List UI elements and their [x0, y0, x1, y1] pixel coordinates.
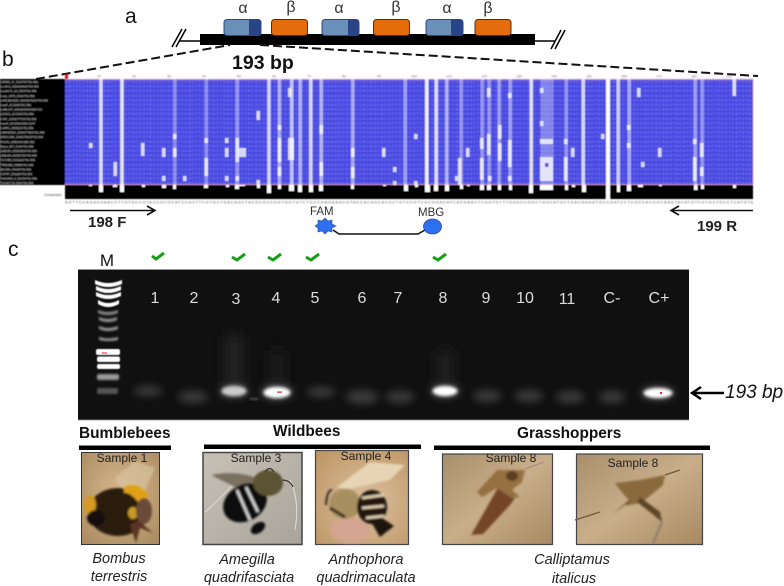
blue conserved residue block: AGTTCCAGACHAACCTTGTGCCGTACCGCGCATCCACTTCGTGCTGACAGCTACGCGCCGGTGGTGTCTGCCGAGAAGCGTACCACAGCACGCTGTCCGTCGCGGACATCACGAACTCGGTGTTTGAGCCGGCTGGCATGCTGACGAAGTGCCGATCCTCGCCACGGCAAGTACATGTCGTGCTGCCTCATGTA [65, 107, 751, 112]
divider Bumblebees [79, 446, 171, 450]
sequence name column: ADEAN_00083700/761-956 [1, 154, 37, 158]
MBG label: MBG [418, 207, 444, 219]
reverse primer arrow [671, 206, 753, 215]
panel a: gene structure diagram [172, 0, 565, 49]
lane numbers: C+ [649, 290, 669, 307]
blue conserved residue block: AGTTCCAGACHAACCTTGTGCCGTACCGCGCATCCACTTCGTGCTGACAGCTACGCGCCGGTGGTGTCTGCCGAGAAGCGTACCACAGCACGCTGTCCGTCGCGGACATCACGAACTCGGTGTTTGAGCCGGCTGGCATGCTGACGAAGTGCCGATCCTCGCCACGGCAAGTACATGTCGTGCTGCCTCATGTA [65, 180, 751, 185]
consensus bar with notches [65, 185, 753, 199]
sequence name column: GFAF1_6*_313/797/761-956 [1, 80, 38, 84]
species label Calliptamus italicus [534, 552, 610, 586]
blue conserved residue block: AGTTCCAGACHAACCTTGTGCCGTACCGCGCATCCACTTCGTGCTGACAGCTACGCGCCGGTGGTGTCTGCCGAGAAGCGTACCACAGCACGCTGTCCGTCGCGGACATCACGAACTCGGTGTTTGAGCCGGCTGGCATGCTGACGAAGTGCCGATCCTCGCCACGGCAAGTACATGTCGTGCTGCCTCATGTA [65, 97, 751, 102]
position ruler: 80 [342, 74, 346, 78]
right break line [535, 30, 565, 49]
position ruler: 10 [97, 74, 101, 78]
sequence name column: LBRM2903_1300077500/761-956 [1, 131, 45, 135]
sequence name column: TcYV88_0101120/761-956 [1, 158, 35, 162]
blue conserved residue block: AGTTCCAGACHAACCTTGTGCCGTACCGCGCATCCACTTCGTGCTGACAGCTACGCGCCGGTGGTGTCTGCCGAGAAGCGTACCACAGCACGCTGTCCGTCGCGGACATCACGAACTCGGTGTTTGAGCCGGCTGGCATGCTGACGAAGTGCCGATCCTCGCCACGGCAAGTACATGTCGTGCTGCCTCATGTA [65, 162, 751, 167]
position ruler: 30 [167, 74, 171, 78]
photo: Calliptamus italicus lateral [575, 454, 702, 544]
blue conserved residue block: AGTTCCAGACHAACCTTGTGCCGTACCGCGCATCCACTTCGTGCTGACAGCTACGCGCCGGTGGTGTCTGCCGAGAAGCGTACCACAGCACGCTGTCCGTCGCGGACATCACGAACTCGGTGTTTGAGCCGGCTGGCATGCTGACGAAGTGCCGATCCTCGCCACGGCAAGTACATGTCGTGCTGCCTCATGTA [65, 88, 751, 93]
species label Bombus terrestris [91, 551, 147, 585]
blue conserved residue block: AGTTCCAGACHAACCTTGTGCCGTACCGCGCATCCACTTCGTGCTGACAGCTACGCGCCGGTGGTGTCTGCCGAGAAGCGTACCACAGCACGCTGTCCGTCGCGGACATCACGAACTCGGTGTTTGAGCCGGCTGGCATGCTGACGAAGTGCCGATCCTCGCCACGGCAAGTACATGTCGTGCTGCCTCATGTA [65, 166, 751, 171]
sequence name column: C3747_236g36/761-956 [1, 172, 33, 176]
panel label b: b [2, 48, 14, 71]
lane numbers: 5 [311, 290, 320, 307]
alpha exon 1 [224, 20, 261, 36]
species label Anthophora quadrimaculata [316, 552, 416, 586]
blue conserved residue block: AGTTCCAGACHAACCTTGTGCCGTACCGCGCATCCACTTCGTGCTGACAGCTACGCGCCGGTGGTGTCTGCCGAGAAGCGTACCACAGCACGCTGTCCGTCGCGGACATCACGAACTCGGTGTTTGAGCCGGCTGGCATGCTGACGAAGTGCCGATCCTCGCCACGGCAAGTACATGTCGTGCTGCCTCATGTA [65, 79, 751, 84]
forward primer arrow [70, 206, 155, 215]
position ruler: 180 [691, 74, 697, 78]
probe diagram [310, 206, 444, 234]
sample label: Sample 8 [608, 456, 659, 470]
blue conserved residue block: AGTTCCAGACHAACCTTGTGCCGTACCGCGCATCCACTTCGTGCTGACAGCTACGCGCCGGTGGTGTCTGCCGAGAAGCGTACCACAGCACGCTGTCCGTCGCGGACATCACGAACTCGGTGTTTGAGCCGGCTGGCATGCTGACGAAGTGCCGATCCTCGCCACGGCAAGTACATGTCGTGCTGCCTCATGTA [65, 102, 751, 107]
blue conserved residue block [65, 79, 753, 185]
sequence name column [0, 79, 65, 185]
green tick lane 3 [232, 254, 245, 260]
lane numbers: 11 [559, 291, 575, 308]
blue conserved residue block: AGTTCCAGACHAACCTTGTGCCGTACCGCGCATCCACTTCGTGCTGACAGCTACGCGCCGGTGGTGTCTGCCGAGAAGCGTACCACAGCACGCTGTCCGTCGCGGACATCACGAACTCGGTGTTTGAGCCGGCTGGCATGCTGACGAAGTGCCGATCCTCGCCACGGCAAGTACATGTCGTGCTGCCTCATGTA [65, 125, 751, 130]
exon labels: α [442, 0, 452, 17]
FAM label: FAM [310, 206, 334, 218]
marker label M: M [100, 251, 114, 270]
photo: Amegilla quadrifasciata [203, 451, 302, 544]
sequence name column: LARLEM1106_0000007000/761-956 [1, 98, 48, 102]
species label Amegilla quadrifasciata: quadrifasciata [204, 570, 294, 586]
sequence name column: BCV84_04024/761-956 [1, 167, 32, 171]
green tick lane 4 [268, 254, 281, 260]
sequence name column: LABL147_0000165000/518-713 [1, 108, 42, 112]
heading Bumblebees: Bumblebees [79, 425, 171, 442]
position ruler: 50 [237, 74, 241, 78]
band size arrow [692, 387, 724, 399]
lane numbers: 7 [394, 290, 403, 307]
reverse primer label: 199 R [697, 218, 737, 235]
exon labels: α [334, 0, 344, 17]
green tick lane 5 [306, 254, 319, 260]
panel b: sequence alignment [0, 74, 753, 204]
sample label: Sample 3 [231, 451, 282, 465]
blue conserved residue block: AGTTCCAGACHAACCTTGTGCCGTACCGCGCATCCACTTCGTGCTGACAGCTACGCGCCGGTGGTGTCTGCCGAGAAGCGTACCACAGCACGCTGTCCGTCGCGGACATCACGAACTCGGTGTTTGAGCCGGCTGGCATGCTGACGAAGTGCCGATCCTCGCCACGGCAAGTACATGTCGTGCTGCCTCATGTA [65, 139, 751, 144]
alpha exon 3 [426, 20, 463, 36]
consensus sequence: AGTTCCAGACHAACCTTGTGCCGTACCGCGCATCCACTTCGTGCTGACAGCTACGCGCCGGTGGTGTCTGCCGAGAAGCGTACCACAGCACGCTGTCCGTCGCGGACATCACGAACTCGGTGTTTGAGCCGGCTGGCATGCTGACGAAGTGCCGATCCTCGCCACGGCAAGTACATGTCGTGCTGCCTCATGTA [65, 200, 753, 204]
lane numbers: 3 [232, 291, 241, 308]
photo: Bombus terrestris [82, 451, 160, 544]
position ruler: 110 [446, 74, 452, 78]
probe line [333, 230, 425, 234]
exon labels: α [238, 0, 248, 17]
lane numbers: 8 [439, 290, 448, 307]
species label Calliptamus italicus: Calliptamus [534, 552, 610, 568]
photo: Calliptamus italicus dorsal [442, 451, 552, 544]
lane numbers: 1 [151, 290, 160, 307]
beta exon 3 [475, 20, 511, 36]
exon labels [238, 0, 493, 17]
sequence name column: LapF_13.0290/761-956 [1, 103, 31, 107]
zoom dashed lines [36, 45, 758, 79]
lane numbers: 6 [358, 290, 367, 307]
sequence name column: ADEAN_00083800/761-956 [1, 149, 37, 153]
green tick lane 8 [433, 254, 446, 260]
species label Amegilla quadrifasciata: Amegilla [218, 552, 275, 568]
lane numbers: 4 [272, 290, 281, 307]
position ruler: 40 [202, 74, 206, 78]
sample label: Sample 8 [486, 451, 537, 465]
blue conserved residue block: AGTTCCAGACHAACCTTGTGCCGTACCGCGCATCCACTTCGTGCTGACAGCTACGCGCCGGTGGTGTCTGCCGAGAAGCGTACCACAGCACGCTGTCCGTCGCGGACATCACGAACTCGGTGTTTGAGCCGGCTGGCATGCTGACGAAGTGCCGATCCTCGCCACGGCAAGTACATGTCGTGCTGCCTCATGTA [65, 111, 751, 116]
lane numbers: 2 [190, 290, 199, 307]
green tick lane 1 [152, 253, 164, 259]
position ruler: 190 [726, 74, 732, 78]
193 bp amplicon heading: 193 bp [232, 52, 294, 74]
left break line [172, 29, 200, 47]
blue conserved residue block: AGTTCCAGACHAACCTTGTGCCGTACCGCGCATCCACTTCGTGCTGACAGCTACGCGCCGGTGGTGTCTGCCGAGAAGCGTACCACAGCACGCTGTCCGTCGCGGACATCACGAACTCGGTGTTTGAGCCGGCTGGCATGCTGACGAAGTGCCGATCCTCGCCACGGCAAGTACATGTCGTGCTGCCTCATGTA [65, 93, 751, 98]
sample label: Sample 1 [97, 451, 148, 465]
heading Grasshoppers: Grasshoppers [517, 425, 621, 442]
sequence name column: LplyHYS_13_1503/761-956 [1, 89, 37, 93]
smears above bands [226, 335, 452, 385]
blue conserved residue block: AGTTCCAGACHAACCTTGTGCCGTACCGCGCATCCACTTCGTGCTGACAGCTACGCGCCGGTGGTGTCTGCCGAGAAGCGTACCACAGCACGCTGTCCGTCGCGGACATCACGAACTCGGTGTTTGAGCCGGCTGGCATGCTGACGAAGTGCCGATCCTCGCCACGGCAAGTACATGTCGTGCTGCCTCATGTA [65, 143, 751, 148]
blue conserved residue block: AGTTCCAGACHAACCTTGTGCCGTACCGCGCATCCACTTCGTGCTGACAGCTACGCGCCGGTGGTGTCTGCCGAGAAGCGTACCACAGCACGCTGTCCGTCGCGGACATCACGAACTCGGTGTTTGAGCCGGCTGGCATGCTGACGAAGTGCCGATCCTCGCCACGGCAAGTACATGTCGTGCTGCCTCATGTA [65, 116, 751, 121]
blue conserved residue block: AGTTCCAGACHAACCTTGTGCCGTACCGCGCATCCACTTCGTGCTGACAGCTACGCGCCGGTGGTGTCTGCCGAGAAGCGTACCACAGCACGCTGTCCGTCGCGGACATCACGAACTCGGTGTTTGAGCCGGCTGGCATGCTGACGAAGTGCCGATCCTCGCCACGGCAAGTACATGTCGTGCTGCCTCATGTA [65, 148, 751, 153]
position ruler: 160 [621, 74, 627, 78]
blue conserved residue block: AGTTCCAGACHAACCTTGTGCCGTACCGCGCATCCACTTCGTGCTGACAGCTACGCGCCGGTGGTGTCTGCCGAGAAGCGTACCACAGCACGCTGTCCGTCGCGGACATCACGAACTCGGTGTTTGAGCCGGCTGGCATGCTGACGAAGTGCCGATCCTCGCCACGGCAAGTACATGTCGTGCTGCCTCATGTA [65, 171, 751, 176]
heading Wildbees: Wildbees [273, 423, 340, 440]
divider Wildbees [204, 444, 421, 449]
sequence name column: LINF_1300077700/761-956 [1, 117, 37, 121]
position ruler: 130 [516, 74, 522, 78]
blue conserved residue block: AGTTCCAGACHAACCTTGTGCCGTACCGCGCATCCACTTCGTGCTGACAGCTACGCGCCGGTGGTGTCTGCCGAGAAGCGTACCACAGCACGCTGTCCGTCGCGGACATCACGAACTCGGTGTTTGAGCCGGCTGGCATGCTGACGAAGTGCCGATCCTCGCCACGGCAAGTACATGTCGTGCTGCCTCATGTA [65, 153, 751, 158]
sequence name column: PCON_00820/00/155-352 [1, 140, 35, 144]
black gene bar [200, 34, 535, 45]
DNA ladder [95, 280, 122, 394]
blue conserved residue block: AGTTCCAGACHAACCTTGTGCCGTACCGCGCATCCACTTCGTGCTGACAGCTACGCGCCGGTGGTGTCTGCCGAGAAGCGTACCACAGCACGCTGTCCGTCGCGGACATCACGAACTCGGTGTTTGAGCCGGCTGGCATGCTGACGAAGTGCCGATCCTCGCCACGGCAAGTACATGTCGTGCTGCCTCATGTA [65, 120, 751, 125]
lane numbers: 10 [516, 290, 534, 307]
position ruler: 100 [411, 74, 417, 78]
FAM fluorophore star [315, 218, 336, 234]
blue conserved residue block: AGTTCCAGACHAACCTTGTGCCGTACCGCGCATCCACTTCGTGCTGACAGCTACGCGCCGGTGGTGTCTGCCGAGAAGCGTACCACAGCACGCTGTCCGTCGCGGACATCACGAACTCGGTGTTTGAGCCGGCTGGCATGCTGACGAAGTGCCGATCCTCGCCACGGCAAGTACATGTCGTGCTGCCTCATGTA [65, 157, 751, 162]
position ruler: 170 [656, 74, 662, 78]
red start marker [65, 74, 68, 79]
position ruler: 60 [272, 74, 276, 78]
sequence name column: LavAf_13.0290/1052-1247 [1, 121, 35, 125]
photo: Anthophora quadrimaculata [316, 449, 408, 544]
species label Bombus terrestris: Bombus [92, 551, 146, 567]
blue conserved residue block: AGTTCCAGACHAACCTTGTGCCGTACCGCGCATCCACTTCGTGCTGACAGCTACGCGCCGGTGGTGTCTGCCGAGAAGCGTACCACAGCACGCTGTCCGTCGCGGACATCACGAACTCGGTGTTTGAGCCGGCTGGCATGCTGACGAAGTGCCGATCCTCGCCACGGCAAGTACATGTCGTGCTGCCTCATGTA [65, 176, 751, 181]
forward primer label: 198 F [88, 214, 126, 231]
lane numbers [151, 290, 669, 308]
sequence name column: Baya_027_0140/761-956 [1, 144, 34, 148]
sequence name column: TPDC5B_03888/761-956 [1, 163, 34, 167]
variable white columns [99, 79, 736, 199]
beta exon 2 [374, 20, 410, 36]
gel electrophoresis image [78, 270, 689, 420]
sequence name column: LDAVS_13.0340/761-956 [1, 112, 34, 116]
blue conserved residue block: AGTTCCAGACHAACCTTGTGCCGTACCGCGCATCCACTTCGTGCTGACAGCTACGCGCCGGTGGTGTCTGCCGAGAAGCGTACCACAGCACGCTGTCCGTCGCGGACATCACGAACTCGGTGTTTGAGCCGGCTGGCATGCTGACGAAGTGCCGATCCTCGCCACGGCAAGTACATGTCGTGCTGCCTCATGTA [65, 134, 751, 139]
lane numbers: C- [604, 290, 620, 307]
exon labels: β [483, 0, 493, 17]
position ruler: 140 [551, 74, 557, 78]
isolated variant cells [89, 88, 704, 185]
consensus label: Consensus [44, 193, 62, 197]
position ruler: 150 [586, 74, 592, 78]
position ruler: 90 [377, 74, 381, 78]
position ruler: 120 [481, 74, 487, 78]
blue conserved residue block: AGTTCCAGACHAACCTTGTGCCGTACCGCGCATCCACTTCGTGCTGACAGCTACGCGCCGGTGGTGTCTGCCGAGAAGCGTACCACAGCACGCTGTCCGTCGCGGACATCACGAACTCGGTGTTTGAGCCGGCTGGCATGCTGACGAAGTGCCGATCCTCGCCACGGCAAGTACATGTCGTGCTGCCTCATGTA [65, 130, 751, 135]
sequence name column: TcIL3000_0_31230/761-956 [1, 177, 37, 181]
MBG quencher circle [424, 219, 442, 234]
sequence name column: LtAPK_1303221/761-956 [1, 126, 34, 130]
sequence name column: TbJ427.01.2340/761-956 [1, 181, 34, 185]
species label Bombus terrestris: terrestris [91, 569, 147, 585]
species label Anthophora quadrimaculata: Anthophora [328, 552, 403, 568]
divider Grasshoppers [434, 446, 710, 450]
alpha exon 2 [322, 20, 359, 36]
species label Amegilla quadrifasciata [204, 552, 294, 586]
sequence name column: LinAC1_09001/8600/761-956 [1, 85, 39, 89]
position ruler: 20 [132, 74, 136, 78]
sequence name column: EMOLV88_1300075000/761-956 [1, 135, 44, 139]
sample label: Sample 4 [341, 449, 392, 463]
PCR bands [134, 385, 674, 404]
position ruler: 70 [307, 74, 311, 78]
panel label c: c [8, 238, 18, 261]
lane numbers: 9 [482, 290, 491, 307]
sequence name column: Luky_0978_0010/761-956 [1, 94, 35, 98]
band size label: 193 bp [725, 382, 783, 403]
position ruler [97, 74, 732, 78]
beta exon 1 [272, 20, 308, 36]
species label Anthophora quadrimaculata: quadrimaculata [316, 570, 416, 586]
blue conserved residue block: AGTTCCAGACHAACCTTGTGCCGTACCGCGCATCCACTTCGTGCTGACAGCTACGCGCCGGTGGTGTCTGCCGAGAAGCGTACCACAGCACGCTGTCCGTCGCGGACATCACGAACTCGGTGTTTGAGCCGGCTGGCATGCTGACGAAGTGCCGATCCTCGCCACGGCAAGTACATGTCGTGCTGCCTCATGTA [65, 84, 751, 89]
panel label a: a [125, 5, 137, 28]
